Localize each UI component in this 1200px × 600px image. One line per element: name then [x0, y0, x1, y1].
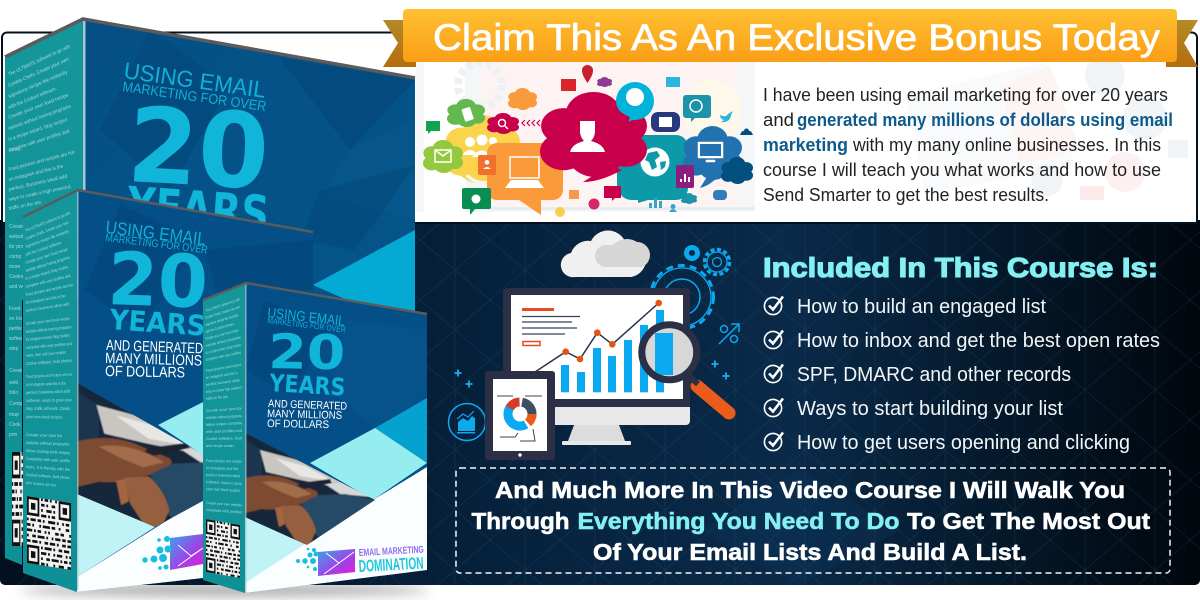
side copy: complete with user profiles — [205, 351, 241, 362]
intro paragraph — [763, 85, 1173, 205]
illustration: analytics monitor — [448, 230, 739, 460]
item 1: How to build an engaged list — [797, 296, 1046, 318]
side copy: perfect business ideal — [206, 473, 240, 478]
side copy: complete with user profiles and — [26, 341, 72, 350]
solid gear — [686, 248, 698, 258]
side copy — [205, 297, 243, 515]
bottom shadow under boxes — [20, 584, 430, 596]
teal small cloud — [681, 193, 697, 204]
side copy: complete with profiles — [206, 508, 242, 515]
many millions: MANY MILLIONS — [105, 350, 202, 370]
cloud tail — [583, 165, 622, 182]
side copy: The ULTIMATE software to go with — [7, 44, 72, 78]
side copy: follow cooking tools recipes — [26, 448, 70, 455]
orange small cloud — [508, 88, 537, 110]
side copy: Cookie — [9, 274, 25, 280]
front face — [245, 283, 427, 593]
mail icon — [435, 150, 451, 162]
small globe — [626, 88, 644, 106]
side copy: Food pictures and recipes — [205, 363, 242, 373]
side copy: signature recipe lite instantly — [7, 69, 69, 100]
small person glyph — [483, 160, 491, 169]
light cyan triangle — [158, 402, 203, 455]
orange person tag — [478, 155, 496, 175]
side copy: Food pictures and recipes — [206, 459, 242, 464]
ribbon: left tail — [383, 20, 416, 67]
line chart — [535, 300, 662, 372]
side copy: Create your own for — [26, 432, 63, 438]
person glyph — [669, 204, 677, 212]
pale yellow cloud — [445, 115, 520, 181]
side copy: follow recipes complete — [206, 421, 242, 427]
red mail — [561, 79, 576, 91]
side copy: with the Cooked software. — [8, 86, 58, 111]
chart glyph — [649, 198, 662, 208]
box 2: middle box — [23, 190, 313, 592]
side copy: Cookie software, food photos — [26, 358, 72, 366]
cyan mail — [666, 77, 680, 87]
side copy: step, traffic all levels. Create — [26, 406, 71, 411]
monitor chin — [503, 407, 690, 425]
purple chart tag — [676, 165, 694, 188]
logo: email marketing domination: EMAIL MARKETING — [359, 545, 424, 559]
side copy: with the Cooked software. — [25, 240, 62, 257]
side copy: software, ways to grow your — [26, 397, 73, 403]
device icon — [461, 107, 474, 122]
banner — [403, 9, 1177, 62]
side copy: Create your own food recipe — [8, 92, 70, 121]
screen — [511, 295, 683, 399]
side copy: map — [9, 412, 19, 418]
using email: USING EMAIL — [105, 217, 207, 249]
panel: dark lower background — [0, 220, 1200, 585]
callout: dashed box: And Much More In This Video Course I Will Walk You — [495, 477, 1125, 503]
illustration: social media bubbles — [423, 65, 753, 217]
photo: hand on phone — [77, 384, 203, 527]
dark navy cloud — [721, 157, 753, 184]
bar chart — [561, 310, 664, 392]
yellow ball — [555, 207, 565, 217]
side copy: website without programs — [206, 414, 242, 420]
side copy: Cookie Chefs. Create your own — [25, 220, 70, 241]
side copy: prin — [9, 432, 18, 438]
green device cloud — [447, 99, 485, 127]
side copy: your own food recipes — [26, 414, 62, 420]
side copy: in a recipe wizard, blog recipes — [25, 264, 69, 281]
monitor stand — [568, 425, 625, 441]
item 2: How to inbox and get the best open rates — [797, 330, 1160, 352]
side copy: Cookie software, food — [206, 436, 242, 441]
green camera bubble — [462, 188, 491, 215]
pale triangle — [245, 517, 307, 583]
ribbon: right tail — [1166, 20, 1198, 67]
side copy: software, ways to grow — [206, 480, 242, 486]
side copy: comp — [9, 254, 21, 260]
side copy: software — [9, 336, 28, 342]
checklist — [764, 296, 1160, 454]
side copy: and we — [9, 284, 25, 290]
side copy: website without having programs — [26, 324, 72, 334]
low poly facets — [100, 30, 415, 250]
side copy: website without programs — [205, 335, 241, 348]
spine edge — [77, 190, 78, 590]
top edge — [203, 283, 427, 314]
intro paragraph: and — [763, 110, 794, 130]
many millions: MANY MILLIONS — [267, 408, 342, 422]
map pin — [582, 65, 593, 83]
laptop icon — [505, 157, 544, 188]
side copy: for program — [9, 244, 35, 250]
people icon — [462, 134, 497, 157]
dark people icon — [740, 128, 753, 135]
percent glyph — [719, 324, 739, 344]
photo: hand on phone — [245, 434, 375, 545]
crimson globe — [588, 198, 600, 210]
side copy: in a recipe wizard, blog recipes — [8, 117, 69, 143]
cloud front — [595, 239, 650, 267]
top edge — [23, 190, 313, 232]
side copy: Create — [9, 368, 24, 374]
side copy: prin recipes are fun — [26, 480, 57, 488]
side copy: on Instagram and this is — [206, 371, 238, 380]
box 1: large back box — [5, 18, 415, 565]
side copy: ways to create high powered — [206, 386, 242, 394]
side copy: more, then add your recipes — [26, 350, 66, 358]
callout: dashed box: Through — [472, 508, 570, 534]
medium blue triangle — [375, 398, 427, 463]
cream triangle — [77, 494, 155, 577]
using email: USING EMAIL — [267, 304, 346, 329]
title: Claim This As An Exclusive Bonus Today — [433, 17, 1161, 58]
monitor body — [503, 288, 690, 410]
mail glyph — [659, 117, 672, 127]
side copy: Create your own food recipe — [205, 328, 239, 341]
side copy: for program wizard, blog recipes — [26, 332, 70, 342]
side copy: Cookie Chefs. Create your own — [7, 56, 70, 89]
side copy: Complete with user profile — [26, 456, 71, 463]
side copy: more. — [9, 147, 22, 153]
side copy: The ULTIMATE software to go with — [205, 297, 240, 313]
intro paragraph: I have been using email marketing for over 20 years — [763, 85, 1168, 105]
side copy: Create your own website — [206, 501, 242, 508]
side copy: signature recipe lite instantly — [25, 228, 70, 249]
monitor glyph — [698, 142, 723, 162]
using email: USING EMAIL — [122, 57, 268, 103]
callout: dashed box: Of Your Email Lists And Build A List. — [593, 539, 1027, 565]
intro paragraph: course I will teach you what works and how to use — [763, 160, 1161, 180]
side copy — [25, 210, 74, 488]
side copy: and recipe center — [206, 444, 235, 448]
small bird — [720, 111, 733, 122]
white lower band — [77, 498, 203, 592]
outlined gear — [704, 250, 730, 274]
qr code — [12, 452, 42, 546]
side copy: website without having programs — [8, 104, 72, 132]
purple small cloud — [597, 77, 612, 87]
light blue triangle — [313, 230, 415, 330]
side copy: web — [9, 380, 18, 386]
side copy: more. It is friendly with the — [26, 464, 71, 472]
blue camera — [713, 190, 727, 200]
and generated: AND GENERATED — [268, 398, 347, 413]
item 5: How to get users opening and clicking — [797, 432, 1130, 454]
side copy: complete with user profiles and — [8, 128, 71, 154]
side copy: Create your own food recipe — [26, 316, 70, 326]
logo: email marketing domination — [296, 545, 424, 576]
left face — [203, 283, 245, 593]
intro paragraph: with my many online businesses. In this — [852, 135, 1161, 155]
side copy: perfect business ideal add — [25, 301, 70, 313]
side copy: traffic on the site. — [8, 200, 43, 212]
blue monitor cloud — [683, 126, 742, 180]
side copy: on Instagram and this is the — [8, 164, 64, 183]
item 4: Ways to start building your list — [797, 398, 1063, 420]
of dollars: OF DOLLARS — [267, 418, 329, 431]
side copy: Cookie Chefs. Create your own — [205, 305, 241, 320]
tablet — [485, 371, 555, 460]
facets — [245, 300, 427, 428]
side copy: Food pictures and recipes are hot — [26, 372, 73, 379]
top edge — [5, 19, 415, 78]
teal web bubble — [683, 95, 711, 122]
teal globe bubble — [617, 135, 688, 203]
side copy: Food pictures and recipes are hot — [8, 149, 76, 173]
panel: white intro panel — [2, 32, 1197, 223]
intro paragraph: generated many millions of dollars using email — [797, 110, 1173, 130]
heading: included in this course: Included In This Course Is: — [763, 252, 1158, 283]
pale cyan diamond — [310, 428, 427, 500]
side copy: Cooked software, food photos — [26, 472, 70, 480]
front face — [85, 18, 415, 330]
side copy: perfect — [9, 326, 25, 332]
side copy: signature recipe lite instantly — [205, 313, 239, 327]
side copy: website without programs. — [26, 440, 70, 447]
marketing for over: MARKETING FOR OVER — [122, 78, 267, 114]
left face — [5, 20, 83, 565]
side copy: step — [9, 346, 19, 352]
cloud back — [561, 230, 646, 277]
tablet screen — [493, 379, 547, 451]
bars glyph — [680, 174, 690, 182]
front face — [77, 190, 313, 592]
donut chart — [497, 396, 542, 441]
yellow tail — [456, 170, 475, 183]
growth icon — [448, 404, 486, 440]
facets — [85, 205, 313, 330]
crimson search cloud — [487, 113, 519, 134]
logo mark — [142, 534, 203, 570]
spine edge — [245, 283, 246, 593]
side copy: Food pictures and recipes are hot — [25, 282, 74, 297]
green chat icon — [426, 121, 440, 134]
left face — [23, 190, 77, 592]
side copy: Cook — [9, 422, 21, 428]
magnifier glyph — [498, 120, 508, 129]
number 20: 20 — [106, 237, 209, 325]
side copy: perfect. Business ideal add — [8, 174, 68, 193]
number 20: 20 — [268, 324, 346, 381]
logo: email marketing domination: DOMINATION — [358, 554, 424, 576]
side copy: website without having programs — [25, 255, 70, 273]
number 20: 20 — [125, 84, 272, 213]
years: YEARS — [108, 303, 207, 343]
orange laptop bubble — [487, 143, 563, 215]
web glyph — [690, 100, 702, 112]
globe — [640, 148, 670, 176]
blue tail — [700, 172, 722, 188]
side copy: on Instagram and this is the — [26, 381, 67, 387]
callout: dashed box: Everything You Need To Do — [578, 508, 900, 534]
marketing for over: MARKETING FOR OVER — [105, 232, 208, 257]
plus marks — [454, 360, 730, 388]
side copy: with user profiles and — [206, 429, 242, 434]
navy mail bubble — [651, 112, 680, 132]
camera glyph — [472, 194, 480, 204]
orange lock — [569, 190, 579, 199]
side copy: on Instagram and this is the — [25, 293, 66, 305]
chevrons — [522, 120, 540, 126]
box 3: front box — [203, 283, 427, 593]
cyan globe bubble — [616, 82, 654, 122]
side copy: complete with user profiles and — [25, 273, 71, 289]
callout: dashed box — [456, 468, 1170, 573]
side copy: on Ins — [9, 316, 23, 322]
intro paragraph: marketing — [763, 135, 848, 155]
text lines — [522, 308, 580, 346]
side copy: your own food recipes — [206, 487, 240, 493]
side copy — [7, 44, 76, 438]
years: YEARS — [124, 176, 271, 244]
and generated: AND GENERATED — [106, 337, 204, 357]
person icon — [570, 121, 605, 152]
side copy: perfect business ideal — [206, 378, 240, 387]
years: YEARS — [268, 369, 346, 402]
marketing for over: MARKETING FOR OVER — [267, 315, 346, 335]
side copy: Create your own for — [206, 406, 243, 413]
item 3: SPF, DMARC and other records — [797, 364, 1071, 386]
qr code — [206, 519, 240, 578]
white lower band — [245, 467, 427, 593]
crimson main cloud — [540, 92, 647, 177]
side copy: Comp — [9, 401, 23, 407]
qr code — [27, 496, 71, 570]
side copy: perfect business ideal add — [26, 388, 71, 395]
light green mail cloud — [423, 140, 463, 173]
of dollars: OF DOLLARS — [105, 363, 185, 381]
tablet button — [518, 453, 522, 457]
side copy: ways to create a high powered, — [8, 184, 72, 203]
side copy: Create your own food recipe — [25, 246, 69, 265]
side copy: with the Cooked software. — [205, 322, 235, 334]
intro paragraph: Send Smarter to get the best results. — [763, 185, 1049, 205]
crimson small bubble — [604, 186, 621, 201]
side copy: Create — [9, 224, 24, 230]
side copy: follo — [9, 390, 18, 396]
side copy: website — [9, 234, 26, 240]
callout: dashed box: To Get The Most Out — [907, 508, 1150, 534]
magnifying glass — [642, 325, 729, 413]
side copy: on Instagram and this — [206, 466, 238, 471]
side copy: The ULTIMATE software to go with — [25, 210, 71, 233]
side copy: more — [9, 264, 21, 270]
monitor base — [562, 441, 631, 445]
side copy: in a recipe wizard, blog recipes — [205, 343, 241, 355]
large gear — [650, 266, 714, 328]
side copy: traffic to the site — [206, 395, 228, 401]
side copy: Food — [9, 306, 21, 312]
spine edge — [83, 19, 86, 299]
